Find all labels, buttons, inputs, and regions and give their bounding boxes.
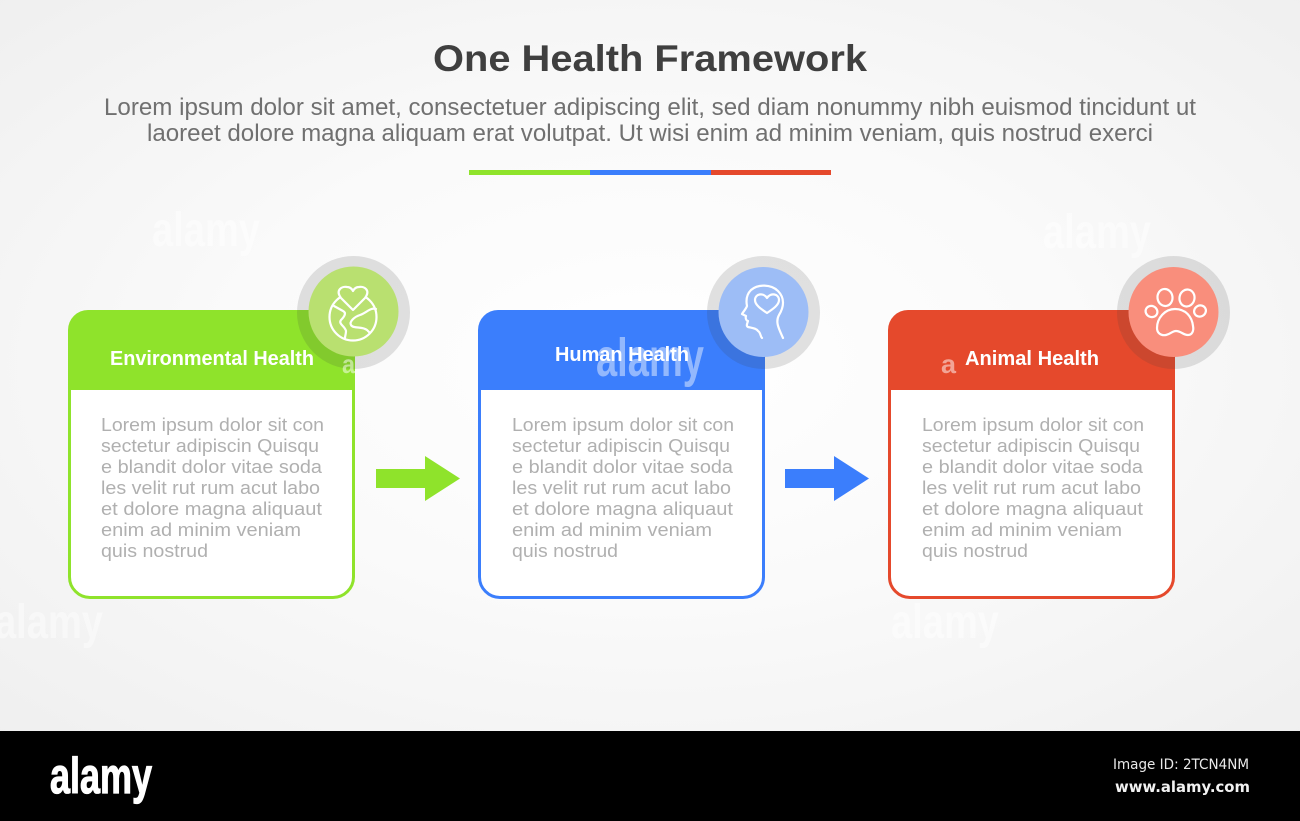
- body text: enim ad minim veniam: [922, 519, 1122, 540]
- body text: e blandit dolor vitae soda: [101, 456, 323, 477]
- watermarks: a: [941, 349, 957, 379]
- heading: animal health: Animal Health: [965, 348, 1099, 370]
- card body: [480, 388, 764, 598]
- subtitle text block: [104, 94, 1196, 147]
- watermarks: alamy: [891, 596, 999, 649]
- body text: et dolore magna aliquaut: [512, 498, 733, 519]
- card header: [888, 310, 1175, 389]
- body text: [512, 414, 734, 561]
- body text: et dolore magna aliquaut: [922, 498, 1143, 519]
- watermarks: alamy: [1043, 206, 1151, 259]
- card header: [68, 310, 355, 389]
- card body: [70, 388, 354, 598]
- footer url: www.alamy.com: [1115, 778, 1250, 796]
- watermarks: a: [342, 349, 355, 379]
- footer image id: Image ID: 2TCN4NM: [1113, 757, 1249, 773]
- subtitle text block: laoreet dolore magna aliquam erat volutpat. Ut wisi enim ad minim veniam, quis nostrud exerci: [147, 120, 1153, 147]
- subtitle text block: Lorem ipsum dolor sit amet, consectetuer adipiscing elit, sed diam nonummy nibh euismod tincidunt ut: [104, 94, 1196, 121]
- panel: human health: [478, 256, 820, 598]
- body text: Lorem ipsum dolor sit con: [922, 414, 1144, 435]
- body text: les velit rut rum acut labo: [512, 477, 731, 498]
- icon badge: globe with heart: [297, 256, 410, 369]
- watermarks: alamy: [152, 204, 260, 257]
- title: One Health Framework: [433, 38, 867, 79]
- body text: enim ad minim veniam: [101, 519, 301, 540]
- panel: environmental health: [68, 256, 410, 598]
- body text: les velit rut rum acut labo: [922, 477, 1141, 498]
- body text: [922, 414, 1144, 561]
- body text: e blandit dolor vitae soda: [922, 456, 1144, 477]
- card body: [890, 388, 1174, 598]
- footer band: [0, 731, 1300, 821]
- body text: quis nostrud: [512, 540, 618, 561]
- body text: les velit rut rum acut labo: [101, 477, 320, 498]
- icon badge: head with heart: [707, 256, 820, 369]
- heading: environmental health: Environmental Health: [110, 348, 314, 370]
- body text: [101, 414, 324, 561]
- body text: sectetur adipiscin Quisqu: [512, 435, 730, 456]
- icon badge: paw: [1117, 256, 1230, 369]
- body text: sectetur adipiscin Quisqu: [101, 435, 319, 456]
- arrow: human to animal: [785, 456, 869, 501]
- body text: sectetur adipiscin Quisqu: [922, 435, 1140, 456]
- body text: Lorem ipsum dolor sit con: [101, 414, 324, 435]
- watermarks: alamy: [596, 328, 704, 388]
- arrow: environmental to human: [376, 456, 460, 501]
- body text: et dolore magna aliquaut: [101, 498, 322, 519]
- body text: Lorem ipsum dolor sit con: [512, 414, 734, 435]
- body text: quis nostrud: [922, 540, 1028, 561]
- card header: [478, 310, 765, 389]
- body text: e blandit dolor vitae soda: [512, 456, 734, 477]
- tricolor divider: [469, 170, 831, 175]
- body text: quis nostrud: [101, 540, 208, 561]
- heading: human health: Human Health: [555, 344, 689, 366]
- panel: animal health: [888, 256, 1230, 598]
- body text: enim ad minim veniam: [512, 519, 712, 540]
- footer logo: alamy: [50, 748, 152, 804]
- watermarks: [0, 204, 1151, 649]
